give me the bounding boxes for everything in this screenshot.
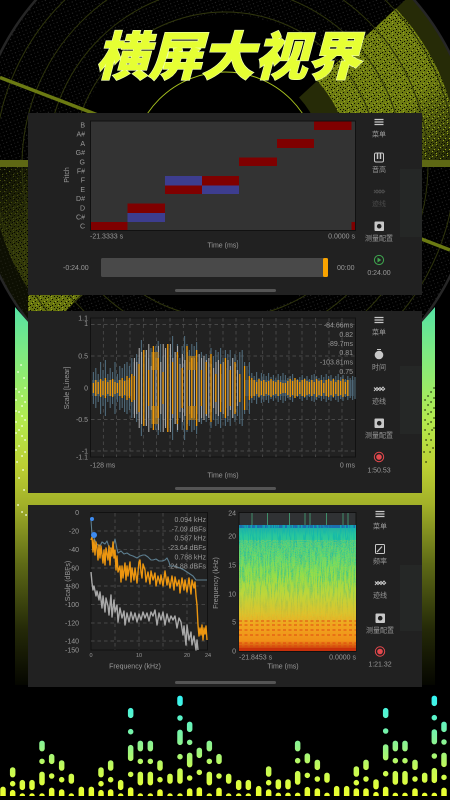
side buttons: [365, 120, 393, 277]
home indicator: [175, 681, 276, 684]
background: olive sector upper right: [299, 0, 450, 165]
spectrum axis labels: Scale (dBFs): [65, 561, 72, 601]
spectrogram axis labels: 0: [232, 648, 236, 656]
pitch axis labels: D#: [76, 196, 85, 203]
spectrogram axis labels: 15: [228, 562, 236, 570]
waveform axis labels: 0: [84, 386, 88, 392]
pitch axis labels: [64, 122, 355, 250]
peak markers: [90, 517, 97, 538]
side buttons: 测量配置: [365, 432, 393, 440]
pitch notes: [91, 122, 355, 230]
panel background: [28, 113, 422, 295]
waveform readouts: -84.66ms: [324, 322, 353, 330]
side buttons: 菜单: [372, 130, 386, 138]
spectrogram axis labels: Frequency (kHz): [213, 557, 220, 609]
waveform axis labels: 0 ms: [340, 462, 355, 470]
pitch axis labels: G#: [76, 150, 85, 157]
waveform axis labels: Time (ms): [207, 472, 239, 480]
spectrogram axis labels: 24: [228, 510, 236, 518]
spectrum grid: [91, 513, 207, 650]
equalizer bars: [3, 698, 444, 800]
white dots on left strip: [16, 365, 26, 515]
spectrum readouts: 0.788 kHz: [174, 554, 206, 562]
waveform readouts: 0.82: [339, 332, 353, 339]
panel: spectrum and spectrogram: [28, 505, 422, 687]
side buttons: 测量配置: [366, 626, 394, 634]
spectrum readouts: -24.88 dBFs: [168, 564, 206, 570]
side highlight: [400, 169, 422, 237]
pitch axis labels: A: [80, 141, 85, 148]
pitch axis labels: Time (ms): [207, 242, 239, 250]
side buttons: 频率: [373, 556, 387, 566]
pitch axis labels: B: [80, 122, 85, 130]
spectrum axis labels: Frequency (kHz): [109, 664, 161, 670]
background: olive sector lower left: [0, 165, 151, 334]
home indicator: [175, 487, 276, 490]
side highlight: [400, 565, 422, 631]
spectrogram axis labels: [213, 510, 356, 670]
spectrogram axis labels: 20: [228, 534, 236, 540]
spectrum axis labels: 10: [136, 653, 142, 659]
side buttons: 迹线: [372, 396, 386, 406]
side buttons: [366, 512, 394, 668]
waveform axis labels: 1.1: [78, 316, 88, 322]
waveform readouts: -103.81ms: [320, 360, 353, 366]
pitch axis labels: G: [80, 160, 85, 166]
spectrum axis labels: 0: [75, 510, 79, 517]
spectrum plot frame: [91, 512, 208, 650]
spectrum readouts: [168, 517, 206, 570]
side highlight: [400, 366, 422, 434]
spectrum readouts: 0.587 kHz: [174, 536, 206, 542]
spectrum axis labels: -20: [69, 528, 79, 536]
scrubber: 00:00: [337, 265, 355, 272]
waveform axis labels: -128 ms: [90, 462, 116, 470]
spectrum axis labels: -80: [69, 584, 79, 590]
waveform axis labels: -1: [82, 448, 88, 456]
waveform plot frame: [90, 318, 356, 457]
pitch plot area: [90, 121, 356, 230]
side buttons: 菜单: [372, 328, 386, 336]
panel background: [28, 311, 422, 493]
panel: pitch chart: [28, 113, 422, 295]
spectrum axis labels: 20: [184, 653, 190, 659]
spectrum readouts: -7.09 dBFs: [172, 526, 206, 534]
title: 横屏大视界: [92, 29, 372, 87]
waveform readouts: [320, 322, 353, 376]
spectrum axis labels: -40: [69, 547, 79, 554]
side buttons: [365, 318, 393, 474]
background: concentric rings: [0, 0, 450, 416]
spectrogram axis labels: Time (ms): [267, 664, 299, 670]
pitch axis labels: Pitch: [64, 167, 71, 183]
spectrogram axis labels: -21.8453 s: [239, 654, 273, 662]
spectrogram axis labels: 0.0000 s: [329, 654, 356, 662]
pitch axis labels: -21.3333 s: [90, 234, 124, 240]
pitch axis labels: F#: [77, 168, 85, 176]
side buttons: 测量配置: [365, 234, 393, 242]
side buttons: 时间: [372, 362, 386, 372]
dark dots on right strip: [424, 388, 434, 462]
spectrum axis labels: [65, 510, 211, 670]
spectrum axis labels: 0: [89, 653, 93, 659]
pitch axis labels: 0.0000 s: [328, 234, 355, 240]
waveform axis labels: -0.5: [76, 417, 88, 424]
spectrum readouts: 0.094 kHz: [174, 517, 206, 524]
neon gradient frame behind panels: [15, 307, 435, 685]
spectrogram axis labels: 5: [232, 620, 236, 626]
spectrum traces: [91, 520, 207, 650]
side buttons: 0:24.00: [367, 270, 391, 277]
side buttons: 1:50.53: [367, 468, 391, 474]
pitch axis labels: A#: [76, 132, 85, 138]
waveform readouts: 0.81: [339, 350, 353, 357]
panel: waveform chart: [28, 311, 422, 493]
waveform readouts: 0.75: [339, 369, 353, 376]
side buttons: 迹线: [372, 199, 386, 208]
scrubber: -0:24.00: [63, 265, 89, 272]
spectrogram: [239, 512, 356, 652]
pitch axis labels: E: [80, 187, 85, 194]
panel background: [28, 505, 422, 687]
waveform axis labels: [64, 316, 355, 480]
side buttons: 迹线: [373, 590, 387, 600]
spectrum axis labels: -60: [69, 566, 79, 572]
waveform grid: [91, 318, 355, 457]
background: faint dot field: [25, 0, 425, 365]
spectrum axis labels: 24: [205, 653, 211, 659]
waveform axis labels: 1: [84, 321, 88, 328]
pitch axis labels: D: [80, 206, 85, 212]
side buttons: 菜单: [373, 522, 387, 530]
spectrogram axis labels: 10: [228, 592, 236, 598]
home indicator: [175, 289, 276, 292]
waveform axis labels: 0.5: [78, 354, 88, 360]
waveform traces: [92, 336, 355, 440]
side buttons: 音高: [372, 165, 386, 174]
spectrum readouts: -23.64 dBFs: [168, 545, 206, 552]
pitch axis labels: F: [81, 178, 85, 184]
pitch axis labels: C: [80, 224, 85, 230]
side buttons: 1:21.32: [368, 662, 392, 668]
scrubber: [63, 258, 355, 277]
waveform axis labels: -1.1: [76, 454, 88, 462]
waveform axis labels: Scale [Linear]: [64, 367, 71, 409]
spectrum axis labels: -120: [65, 620, 79, 628]
spectrum axis labels: -140: [65, 638, 79, 646]
waveform readouts: -89.7ms: [328, 341, 353, 348]
pitch axis labels: C#: [76, 214, 85, 222]
spectrum axis labels: -150: [65, 648, 79, 654]
background: olive stripes: [0, 78, 450, 250]
spectrum axis labels: -100: [65, 602, 79, 609]
